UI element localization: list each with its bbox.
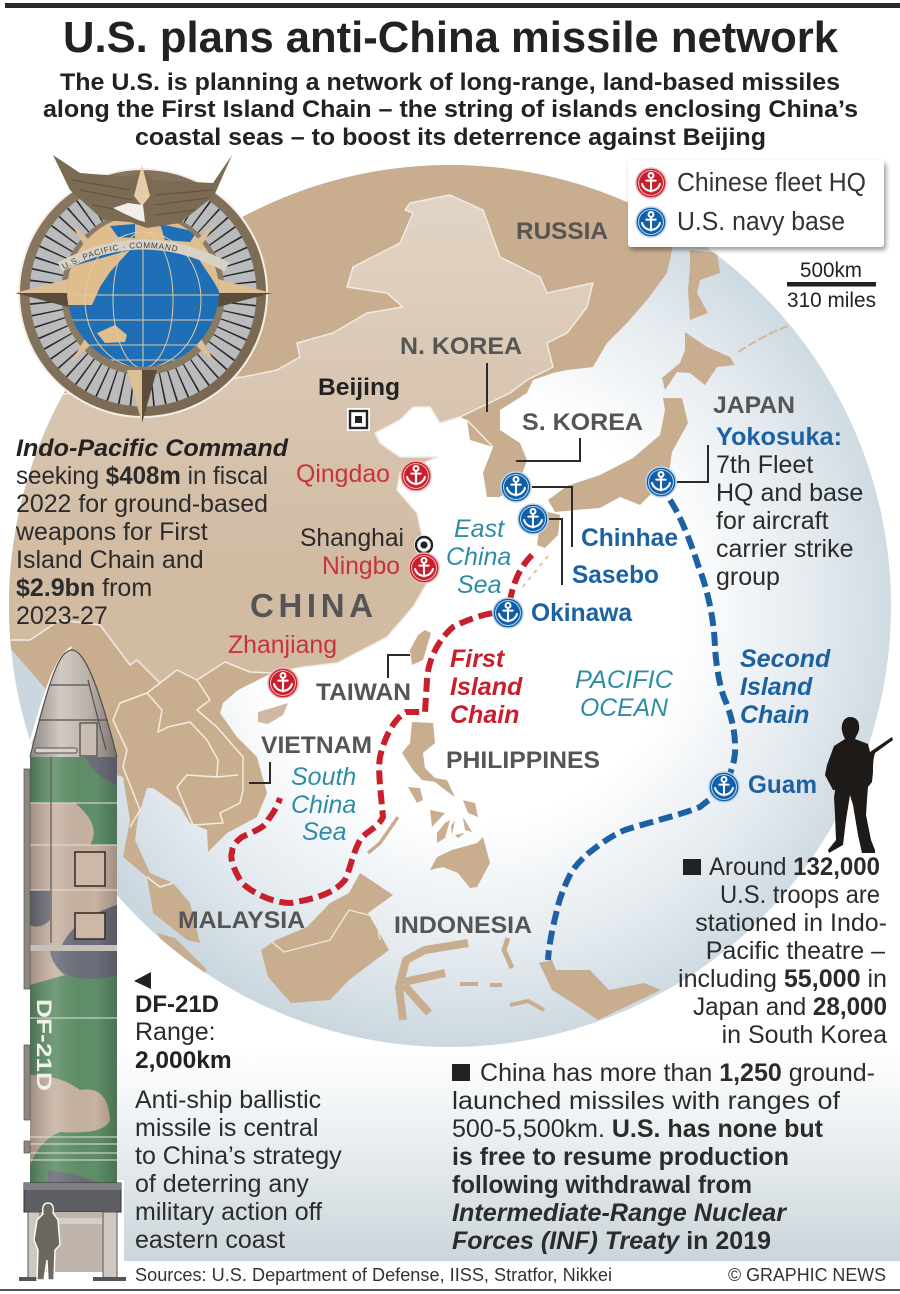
South China Sea label: South [291, 763, 356, 791]
label: Indonesia: INDONESIA [394, 912, 532, 939]
panel: China missiles text: 500-5,500km. U.S. has none but [452, 1115, 824, 1143]
Yokosuka base: HQ and base [716, 479, 863, 507]
South China Sea label [291, 763, 356, 846]
side strips [24, 769, 30, 1153]
legend: U.S. navy base: U.S. navy base [677, 208, 845, 236]
Second Island Chain label: Island [740, 673, 813, 701]
panel: troops text: in South Korea [722, 1021, 887, 1049]
launcher legs and skirt [40, 1212, 103, 1272]
Okinawa base [493, 598, 633, 628]
Ningbo base [322, 552, 439, 583]
label: China: CHINA [250, 587, 373, 624]
globe [67, 215, 219, 367]
body camouflage [30, 757, 117, 1184]
person for scale [34, 1203, 60, 1280]
subtitle: coastal seas – to boost its deterrence against Beijing [135, 124, 766, 151]
First Island Chain label: First [450, 645, 506, 673]
panel: Indo-Pacific Command text: seeking $408m in fiscal [16, 462, 268, 490]
Kuril islands [738, 326, 788, 352]
icon: range arrow [134, 972, 151, 989]
Lesser Sunda islands [460, 984, 544, 1010]
scale bar: 500km [800, 259, 862, 282]
emblem: U.S. Pacific Command seal: U.S. PACIFIC · COMMAND [62, 242, 178, 268]
Hainan [258, 703, 288, 724]
Yokosuka base: 7th Fleet [716, 451, 813, 479]
label: Taiwan: TAIWAN [316, 679, 411, 706]
label: S. Korea: S. KOREA [522, 409, 643, 436]
panel: Indo-Pacific Command text: 2023-27 [16, 602, 108, 630]
Shanghai: Shanghai [300, 524, 404, 552]
nose fitting [80, 723, 97, 756]
panel: China missiles text: Intermediate-Range Nuclear [452, 1199, 787, 1227]
Pacific Ocean label [575, 666, 674, 722]
Hokkaido [662, 332, 735, 390]
eagle head [113, 203, 145, 222]
nose cone [30, 650, 117, 757]
panel: China missiles text: is free to resume production [452, 1143, 789, 1171]
panel: DF-21D text: Anti-ship ballistic [135, 1086, 321, 1114]
eagle wings [53, 155, 232, 228]
subtitle [43, 69, 858, 151]
Qingdao base [296, 460, 431, 491]
label: Japan: JAPAN [713, 392, 795, 419]
East China Sea label: East [454, 515, 505, 543]
panel: troops text [678, 853, 887, 1049]
Okinawa base: Okinawa [531, 599, 633, 627]
Honshu [548, 398, 688, 512]
label: Vietnam: VIETNAM [261, 732, 372, 759]
Yokosuka base [646, 423, 863, 591]
Sakhalin [688, 250, 720, 320]
icon: soldier silhouette [825, 717, 893, 853]
Qingdao base: Qingdao [296, 460, 390, 488]
second island chain route [548, 500, 735, 960]
Luzon [402, 722, 455, 797]
Borneo [261, 873, 393, 1003]
subtitle: along the First Island Chain – the string of islands enclosing China’s [43, 96, 858, 123]
credit: © GRAPHIC NEWS [728, 1265, 886, 1285]
Sasebo base [518, 504, 659, 589]
South China Sea label: Sea [302, 818, 347, 846]
Yokosuka base: Yokosuka: [716, 423, 842, 451]
Chinhae base: Chinhae [581, 524, 678, 552]
Second Island Chain label: Chain [740, 701, 809, 729]
Sasebo base: Sasebo [572, 561, 659, 589]
Ningbo base: Ningbo [322, 552, 400, 580]
Yokosuka base: carrier strike [716, 535, 854, 563]
China [0, 195, 593, 683]
Second Island Chain label: Second [740, 645, 831, 673]
Ryukyu islands [520, 556, 548, 590]
panel: DF-21D text: missile is central [135, 1114, 318, 1142]
panel: DF-21D text: DF-21D [135, 991, 219, 1018]
Palawan [368, 817, 398, 853]
ribbon [60, 244, 227, 267]
Second Island Chain label [740, 645, 831, 729]
panel: Indo-Pacific Command text: 2022 for ground-based [16, 490, 268, 518]
seal rings [18, 168, 268, 418]
Pacific Ocean label: PACIFIC [575, 666, 674, 694]
mainland Asia [0, 150, 700, 943]
Guam base [709, 771, 817, 802]
body hatches [75, 852, 105, 886]
panel: troops text: Japan and 28,000 [693, 993, 887, 1021]
panel: Indo-Pacific Command text: Indo-Pacific Command [16, 435, 289, 462]
East China Sea label [446, 515, 511, 599]
panel: troops text: U.S. troops are [720, 881, 880, 909]
panel: DF-21D text: to China’s strategy [135, 1142, 342, 1170]
Chinhae base [501, 472, 678, 552]
First Island Chain label: Chain [450, 701, 519, 729]
bottom rule [0, 1289, 900, 1291]
South China Sea label: China [291, 791, 356, 819]
panel: DF-21D text: eastern coast [135, 1226, 285, 1254]
Zhanjiang base [228, 631, 337, 698]
panel: China missiles text [452, 1059, 875, 1255]
panel: China missiles text: Forces (INF) Treaty in 2019 [452, 1227, 771, 1255]
Beijing [318, 374, 400, 431]
panel: troops text: stationed in Indo- [695, 909, 887, 937]
panel: Indo-Pacific Command text: Island Chain and [16, 546, 204, 574]
New Guinea [539, 960, 661, 1020]
label: Philippines: PHILIPPINES [446, 747, 600, 774]
panel: DF-21D text: of deterring any [135, 1170, 309, 1198]
SE Asia borders [113, 420, 493, 887]
Beijing: Beijing [318, 374, 400, 401]
Sulawesi [399, 943, 468, 1020]
Kyushu [537, 512, 560, 548]
Pacific Ocean label: OCEAN [580, 694, 669, 722]
sources: Sources: U.S. Department of Defense, IISS, Stratfor, Nikkei [135, 1265, 612, 1285]
panel: DF-21D text: Range: [135, 1018, 216, 1046]
Taiwan [410, 630, 431, 665]
illustration: DF-21D missile [16, 646, 126, 1284]
panel: Indo-Pacific Command text [15, 435, 289, 630]
legend: Chinese fleet HQ: Chinese fleet HQ [677, 169, 866, 197]
missile name: DF-21D [32, 999, 55, 1091]
label: N. Korea: N. KOREA [400, 333, 522, 360]
panel: Indo-Pacific Command text: weapons for First [15, 518, 208, 546]
First Island Chain label [450, 645, 523, 729]
panel: DF-21D text [134, 972, 342, 1254]
launch ring [24, 1183, 121, 1212]
panel: DF-21D text: 2,000km [135, 1047, 232, 1074]
scale bar: 310 miles [787, 289, 876, 312]
panel: China missiles text: following withdrawal from [452, 1171, 752, 1199]
Yokosuka base: for aircraft [716, 507, 829, 535]
Guam base: Guam [748, 771, 817, 799]
country label lines [249, 363, 708, 783]
compass points [15, 222, 272, 423]
scale bar [787, 259, 876, 312]
top point [134, 165, 150, 206]
panel: China missiles text: China has more than 1,250 ground- [480, 1059, 875, 1087]
panel: China missiles text: launched missiles with ranges of [452, 1087, 840, 1115]
Mindanao [430, 837, 490, 888]
emblem: U.S. Pacific Command seal [15, 155, 272, 423]
Maluku [504, 938, 512, 968]
panel: DF-21D text: military action off [135, 1198, 322, 1226]
Sumatra [157, 933, 207, 972]
panel: Indo-Pacific Command text: $2.9bn from [16, 574, 152, 602]
top rule [5, 3, 900, 8]
title: U.S. plans anti-China missile network [63, 13, 839, 62]
Zhanjiang base: Zhanjiang [228, 631, 337, 659]
East China Sea label: China [446, 543, 511, 571]
Visayas [408, 787, 478, 843]
legend [628, 160, 884, 247]
subtitle: The U.S. is planning a network of long-range, land-based missiles [60, 69, 840, 96]
panel: troops text: including 55,000 in [678, 965, 887, 993]
first island chain route [231, 555, 532, 903]
missile outline halo [16, 646, 124, 1284]
label: Malaysia: MALAYSIA [178, 907, 305, 934]
First Island Chain label: Island [450, 673, 523, 701]
land masses [0, 150, 788, 1020]
panel: troops text: Pacific theatre – [706, 937, 885, 965]
map: globe of East Asia [0, 150, 891, 1047]
sea [9, 165, 891, 1047]
Yokosuka base: group [716, 563, 780, 591]
panel: bottom gradient background [113, 1047, 900, 1261]
East China Sea label: Sea [457, 571, 502, 599]
label: Russia: RUSSIA [516, 218, 608, 245]
panel: troops text: Around 132,000 [709, 853, 880, 881]
